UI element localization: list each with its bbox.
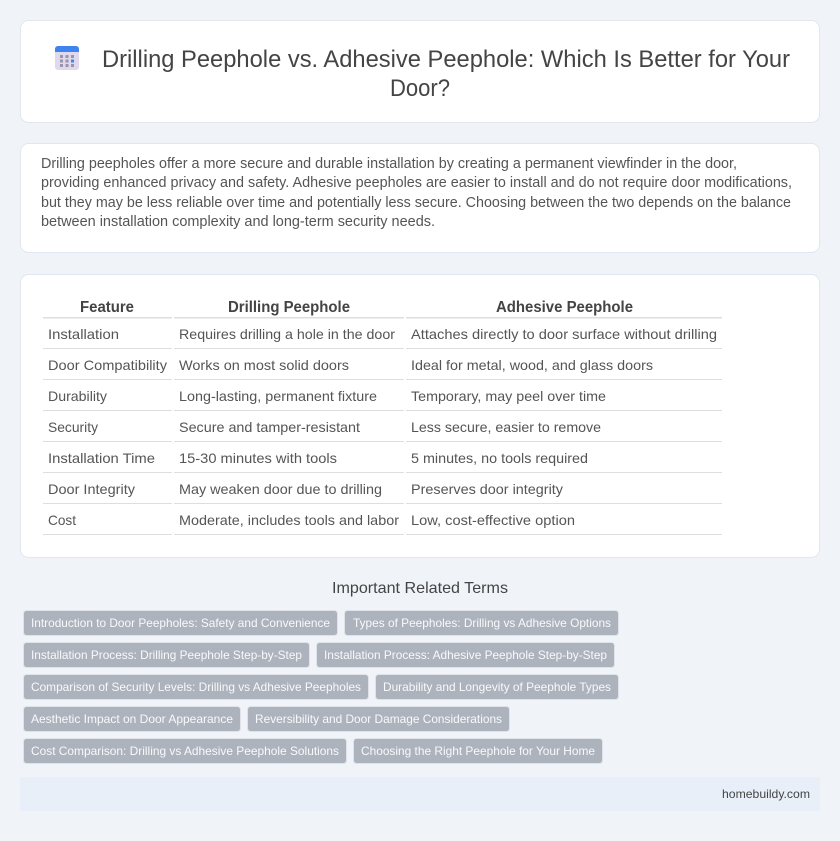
tag bbox=[344, 610, 618, 636]
table header: Adhesive Peephole bbox=[496, 299, 633, 316]
tag: Comparison of Security Levels: Drilling vs Adhesive Peepholes bbox=[31, 680, 361, 694]
tag: Installation Process: Drilling Peephole Step-by-Step bbox=[31, 648, 302, 662]
row: Installation: Attaches directly to door surface without drilling bbox=[411, 326, 717, 342]
tag: Introduction to Door Peepholes: Safety and Convenience bbox=[31, 616, 330, 630]
panel: header bbox=[20, 20, 820, 122]
tag bbox=[24, 674, 368, 700]
panel: introduction bbox=[20, 144, 820, 252]
tag bbox=[376, 674, 618, 700]
row: Installation: Requires drilling a hole in the door bbox=[179, 326, 395, 342]
table header: Feature bbox=[80, 299, 134, 316]
tag: Reversibility and Door Damage Considerations bbox=[255, 712, 502, 726]
row: Installation: Installation bbox=[48, 326, 119, 342]
table header bbox=[80, 299, 633, 316]
tag bbox=[24, 738, 346, 764]
row: Security bbox=[48, 419, 601, 435]
row: Durability: Long-lasting, permanent fixture bbox=[179, 388, 377, 404]
tag: Types of Peepholes: Drilling vs Adhesive Options bbox=[353, 616, 611, 630]
panel: comparison table bbox=[20, 274, 820, 558]
tag: Cost Comparison: Drilling vs Adhesive Peephole Solutions bbox=[31, 744, 339, 758]
tag: Aesthetic Impact on Door Appearance bbox=[31, 712, 233, 726]
row: Durability: Durability bbox=[48, 388, 107, 404]
title: Door? bbox=[390, 75, 450, 102]
text block: summary bbox=[41, 156, 792, 230]
row: Security: Less secure, easier to remove bbox=[411, 419, 601, 435]
tag bbox=[24, 706, 240, 732]
title bbox=[102, 46, 790, 102]
tag bbox=[24, 610, 338, 636]
row: Installation bbox=[48, 326, 717, 342]
heading: related terms: Important Related Terms bbox=[332, 580, 508, 597]
row: Door Integrity: Door Integrity bbox=[48, 481, 135, 497]
row: Cost: Moderate, includes tools and labor bbox=[179, 512, 399, 528]
icon: calendar bbox=[55, 46, 79, 70]
tag bbox=[248, 706, 510, 732]
row: Security: Secure and tamper-resistant bbox=[179, 419, 360, 435]
row: Installation Time bbox=[48, 450, 588, 466]
row: Installation Time: 15-30 minutes with tools bbox=[179, 450, 337, 466]
tag: Installation Process: Adhesive Peephole Step-by-Step bbox=[324, 648, 607, 662]
text block: summary: Drilling peepholes offer a more secure and durable installation by creating a permanent viewfinder in the door, bbox=[41, 156, 737, 172]
row: Durability bbox=[48, 388, 606, 404]
footer bbox=[20, 777, 820, 811]
panel: related term tags bbox=[24, 610, 618, 764]
text block: summary: providing enhanced privacy and safety. Adhesive peepholes are easier to install and do not require door modifications, bbox=[41, 175, 792, 191]
row: Door Integrity: Preserves door integrity bbox=[411, 481, 563, 497]
tag: Choosing the Right Peephole for Your Home bbox=[361, 744, 595, 758]
row: Security: Security bbox=[48, 419, 98, 435]
row: Installation Time: Installation Time bbox=[48, 450, 155, 466]
row: Durability: Temporary, may peel over time bbox=[411, 388, 606, 404]
row: Installation Time: 5 minutes, no tools required bbox=[411, 450, 588, 466]
text block: summary: between installation complexity and long-term security needs. bbox=[41, 214, 435, 230]
row: Door Compatibility: Ideal for metal, wood, and glass doors bbox=[411, 357, 653, 373]
row: Door Integrity: May weaken door due to drilling bbox=[179, 481, 382, 497]
table header: Drilling Peephole bbox=[228, 299, 350, 316]
row: Cost bbox=[48, 512, 575, 528]
tag bbox=[354, 738, 602, 764]
tag: Durability and Longevity of Peephole Types bbox=[383, 680, 611, 694]
row: Door Compatibility: Works on most solid doors bbox=[179, 357, 349, 373]
row: Door Compatibility: Door Compatibility bbox=[48, 357, 167, 373]
text block: summary: but they may be less reliable over time and potentially less secure. Choosing between the two depends on the balance bbox=[41, 195, 791, 211]
row: Door Compatibility bbox=[48, 357, 653, 373]
tag bbox=[24, 642, 310, 668]
row: Cost: Cost bbox=[48, 512, 76, 528]
footer: homebuildy.com bbox=[722, 787, 810, 801]
row: Door Integrity bbox=[48, 481, 563, 497]
title: Drilling Peephole vs. Adhesive Peephole: Which Is Better for Your bbox=[102, 46, 790, 73]
tag bbox=[316, 642, 614, 668]
row: Cost: Low, cost-effective option bbox=[411, 512, 575, 528]
